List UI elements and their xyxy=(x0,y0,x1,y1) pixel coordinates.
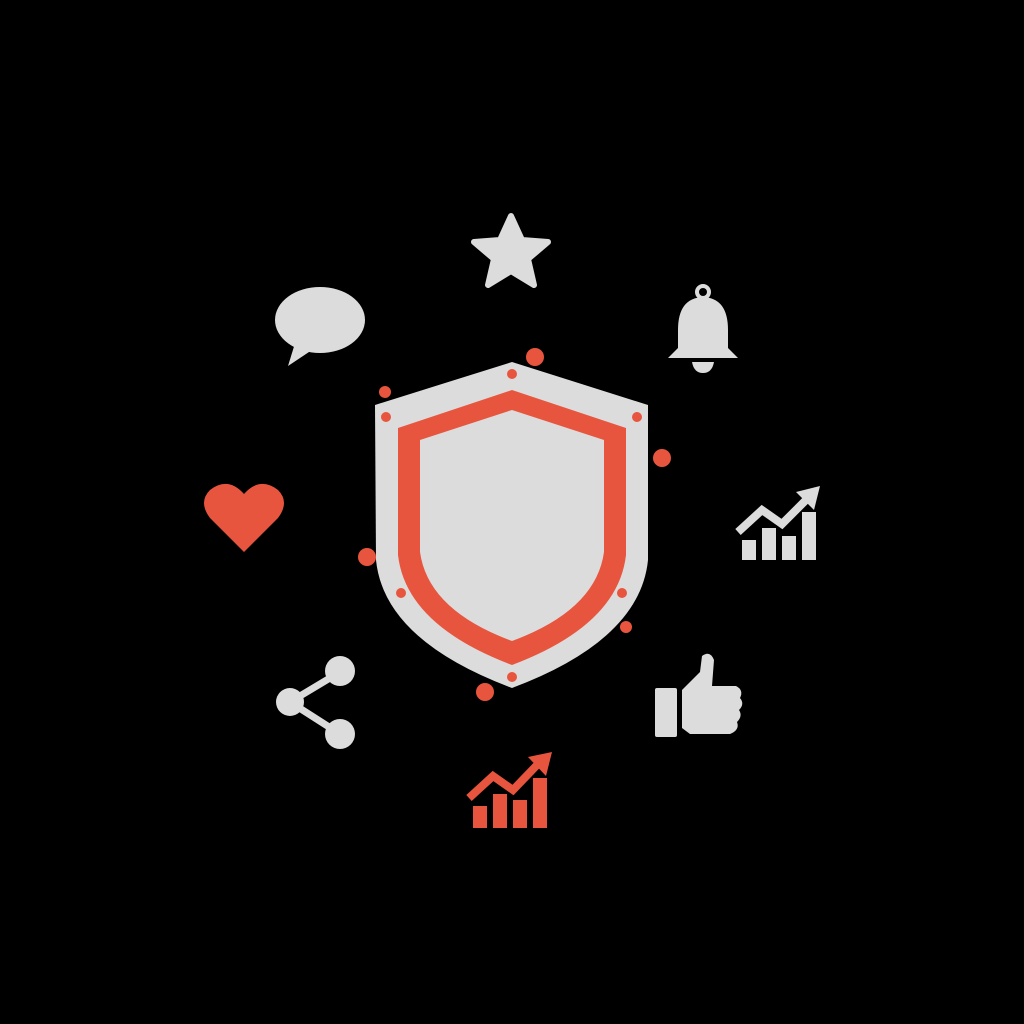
decorative dots around shield xyxy=(358,348,671,701)
icon: growth chart white xyxy=(738,486,820,560)
icon: share xyxy=(276,656,355,749)
icon: heart xyxy=(204,484,284,552)
icon: growth chart red xyxy=(469,752,552,828)
icon: speech bubble xyxy=(275,287,365,366)
icon: shield xyxy=(375,362,648,688)
icon: bell xyxy=(668,286,738,373)
icon: thumbs up xyxy=(655,654,742,737)
icon: star xyxy=(474,216,548,285)
